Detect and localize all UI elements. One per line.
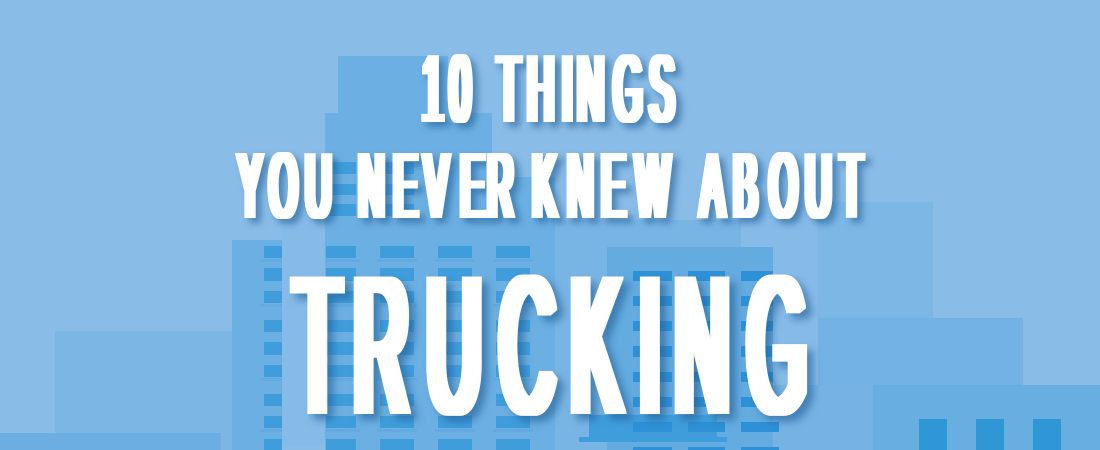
title xyxy=(238,36,862,450)
building: low right block with windows xyxy=(873,385,1100,450)
title line 3: TRUCKING xyxy=(294,235,806,450)
right tower windows xyxy=(633,271,779,450)
title line 2: YOU NEVER KNEW ABOUT xyxy=(238,133,862,237)
building: far left low block xyxy=(0,331,232,450)
tower ledges xyxy=(260,259,533,432)
building: right tower xyxy=(579,247,773,450)
building: central tower xyxy=(232,56,741,450)
tower windows xyxy=(264,162,530,450)
title line 1: 10 THINGS xyxy=(422,36,674,143)
building: right background blocks xyxy=(713,200,1023,450)
